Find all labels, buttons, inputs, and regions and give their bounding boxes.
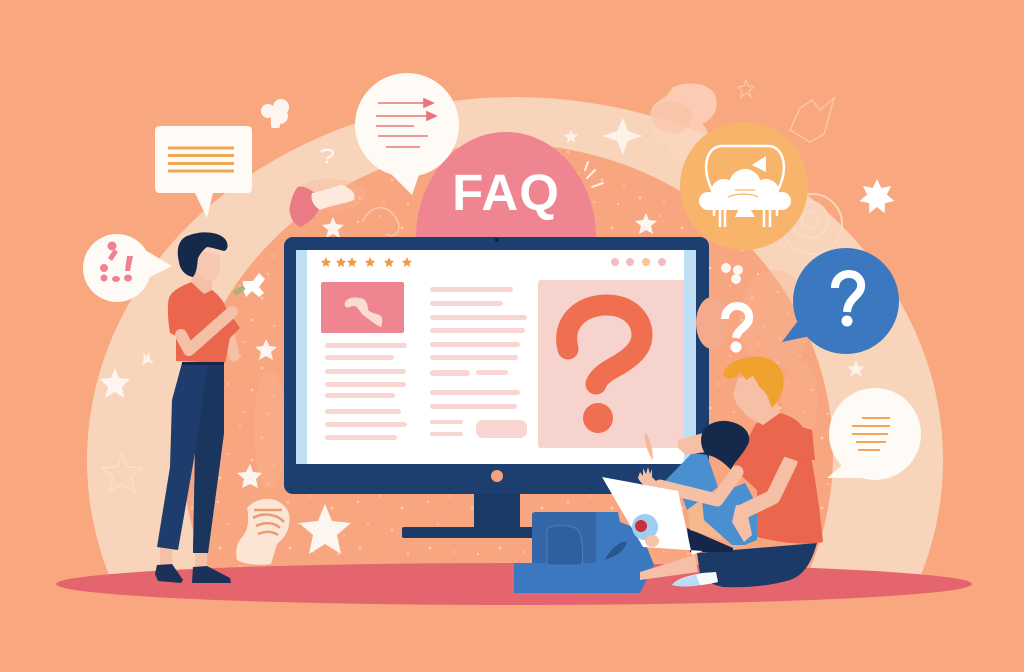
basket doodle bbox=[236, 499, 290, 565]
near arm bbox=[181, 312, 232, 350]
faint background doodles bbox=[362, 83, 842, 254]
monitor frame bbox=[284, 237, 709, 494]
icon: clover top left bbox=[261, 99, 289, 128]
blue question bubble bbox=[782, 248, 899, 354]
man's neck and face bbox=[747, 395, 780, 425]
woman's lower leg bbox=[687, 528, 733, 552]
monitor stand bbox=[402, 490, 588, 538]
torso bbox=[168, 282, 240, 363]
man's sleeve bbox=[780, 425, 815, 462]
circle and red sticker bbox=[632, 514, 659, 547]
middle text lines bbox=[430, 287, 527, 438]
camera dot bbox=[495, 238, 499, 242]
woman's torso bbox=[702, 483, 757, 545]
shoes bbox=[155, 564, 183, 583]
woman's face bbox=[678, 433, 705, 455]
woman's hair bbox=[701, 421, 749, 470]
star rating bbox=[321, 257, 412, 267]
speckle texture bbox=[183, 144, 833, 580]
speech bubble: list top left bbox=[155, 126, 252, 218]
speech bubble: arrows top centre bbox=[355, 73, 459, 195]
man's trousers bbox=[697, 543, 817, 587]
trousers bbox=[157, 363, 224, 553]
power light bbox=[491, 470, 503, 482]
hair bbox=[178, 232, 228, 277]
small question mark left bbox=[321, 150, 333, 164]
feather bbox=[645, 432, 653, 460]
FAQ badge: FAQ bbox=[452, 164, 560, 221]
orange circle icon: cloud and tree bbox=[680, 122, 808, 250]
tan gap behind woman bbox=[687, 500, 722, 540]
man's hair bbox=[723, 357, 784, 408]
far forearm bbox=[228, 328, 234, 356]
person standing bbox=[155, 232, 265, 583]
man's near arm bbox=[742, 462, 790, 512]
device in hand bbox=[233, 273, 265, 297]
hand doodle top left of monitor bbox=[289, 185, 355, 227]
window dots bbox=[611, 258, 666, 266]
FAQ badge bbox=[416, 132, 596, 238]
man's bare leg bbox=[640, 555, 698, 580]
mottled patches bbox=[254, 179, 818, 490]
monitor screen bbox=[296, 250, 696, 464]
inner orange arch bbox=[183, 144, 833, 580]
outer light arch bbox=[87, 97, 943, 580]
man's torso bbox=[733, 413, 823, 544]
belly hand bbox=[732, 505, 752, 542]
man's far arm around woman bbox=[660, 472, 737, 500]
speech bubble: exclamation marks bbox=[83, 234, 172, 302]
left text lines bbox=[325, 343, 407, 440]
ankles bbox=[160, 545, 207, 570]
question card bbox=[538, 280, 684, 448]
sneaker bbox=[672, 572, 718, 586]
head bbox=[195, 250, 220, 281]
speech bubble: lines right bbox=[827, 388, 921, 480]
toolbox bbox=[514, 512, 654, 593]
image thumbnail bbox=[321, 282, 404, 333]
floor ellipse bbox=[56, 563, 972, 605]
neck bbox=[192, 270, 212, 294]
monitor bbox=[284, 237, 709, 538]
couple seated bbox=[602, 357, 823, 587]
sparkle lines beside FAQ bbox=[585, 162, 603, 187]
woman's bent legs bbox=[663, 453, 718, 510]
raised hand bbox=[638, 467, 659, 490]
paper held bbox=[602, 477, 703, 555]
decorative stars and sparkles bbox=[100, 80, 894, 554]
question mark and dots beside couple bbox=[696, 263, 749, 352]
